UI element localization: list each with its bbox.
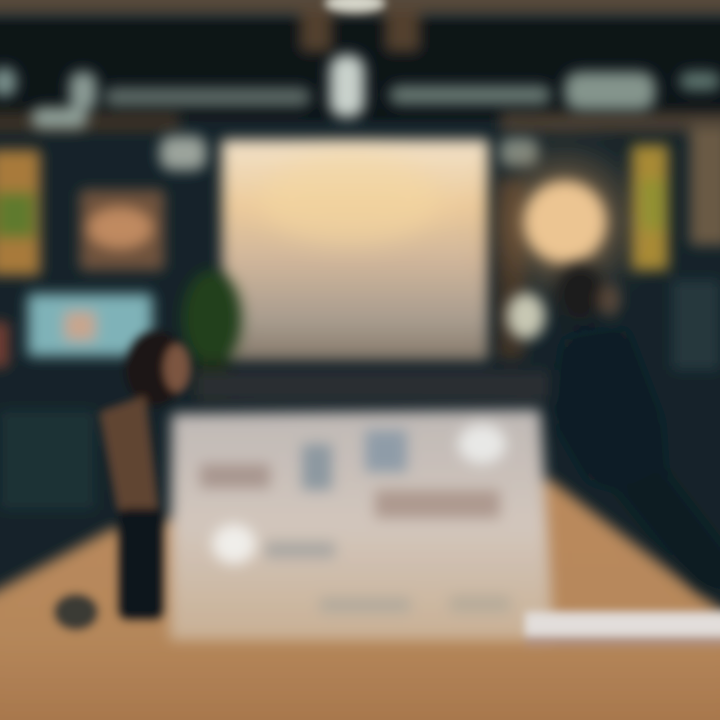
round lamp (524, 181, 606, 263)
small light (507, 293, 545, 339)
paper details (200, 424, 510, 612)
title band: blurred lettering (0, 55, 720, 170)
left wall panels (0, 150, 164, 510)
wooden table (0, 480, 720, 720)
white book on table (525, 612, 720, 646)
shelf strip under screen (195, 370, 550, 402)
person left (100, 330, 190, 620)
ceiling band (0, 0, 720, 132)
ceiling light (325, 0, 385, 12)
person right (555, 264, 720, 590)
right wall panels (497, 125, 720, 370)
projection screen (222, 140, 488, 360)
upper dark wall (0, 20, 720, 120)
lamp glow (503, 160, 627, 284)
plant (182, 270, 242, 395)
object on table left (54, 594, 98, 630)
paper on table (170, 410, 554, 640)
